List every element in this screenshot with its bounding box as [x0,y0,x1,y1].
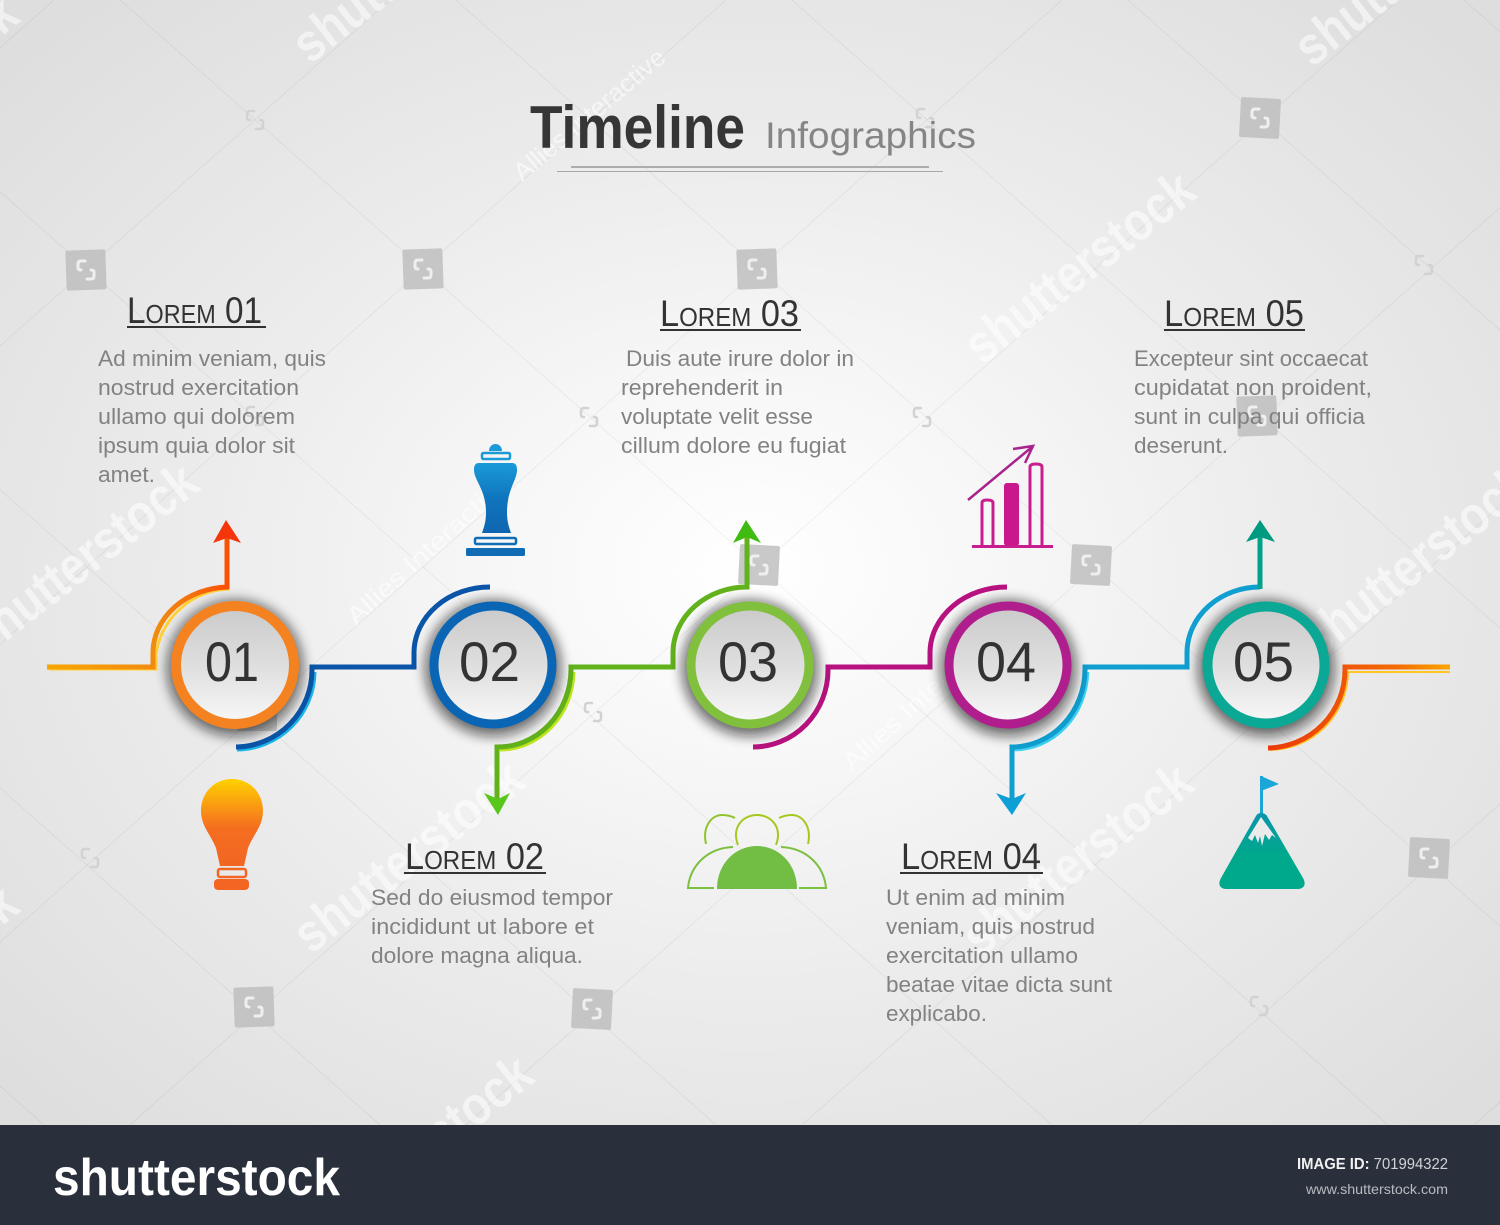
text block: Lorem 01: ipsum quia dolor sit [98,433,296,458]
text block: Lorem 04: exercitation ullamo [886,943,1078,968]
step circle 03: 03 [718,630,778,693]
text block: Lorem 02: incididunt ut labore et [371,914,595,939]
text block: Lorem 02: dolore magna aliqua. [371,943,583,968]
heading: Lorem 04: Lorem 04 [901,836,1041,877]
connector: blue line [236,587,490,750]
footer url: www.shutterstock.com [1305,1181,1448,1197]
watermark overlay: Allies Interactive [508,43,671,187]
step circle 05 [1198,600,1334,736]
connector: cyan line with down arrow [996,520,1275,815]
watermark overlay: shutterstock [281,747,536,964]
text block: Lorem 05: Excepteur sint occaecat [1134,346,1369,371]
text block: Lorem 01: nostrud exercitation [98,375,299,400]
text block: Lorem 01: ullamo qui dolorem [98,404,295,429]
watermark overlay: Allies Interactive [341,469,516,630]
text block: Lorem 04: Ut enim ad minim [886,885,1065,910]
text block: Lorem 01: Ad minim veniam, quis [98,346,326,371]
heading: Lorem 02: Lorem 02 [405,836,544,877]
icon: people group [688,815,826,889]
text block: Lorem 05 [1134,346,1372,458]
title [530,94,976,172]
watermark overlay: shutterstock [950,750,1205,967]
icon: bar chart with arrow [968,446,1053,546]
icon: mountain with flag [1219,776,1305,889]
text block: Lorem 04: explicabo. [886,1001,987,1026]
step circle 01: 01 [205,630,259,693]
text block: Lorem 02 [371,885,614,968]
heading: Lorem 05: Lorem 05 [1164,293,1304,334]
title: Infographics [765,115,976,156]
step circle 04: 04 [976,630,1036,693]
text block: Lorem 02: Sed do eiusmod tempor [371,885,614,910]
footer logo: shutterstock [53,1149,340,1207]
step circle 02: 02 [459,630,520,693]
heading: Lorem 01: Lorem 01 [127,290,262,331]
connector: orange line with up arrow [47,520,241,669]
icon: light bulb [201,779,263,890]
watermark overlay: Allies Interactive [837,615,1012,776]
text block: Lorem 03: cillum dolore eu fugiat [621,433,847,458]
title: Timeline [530,94,745,161]
connector: magenta line [753,587,1007,747]
text block: Lorem 01 [98,346,326,487]
text block: Lorem 05: sunt in culpa qui officia [1134,404,1365,429]
step circle 04 [940,600,1076,736]
footer bar [0,1125,1500,1225]
heading: Lorem 03: Lorem 03 [660,293,799,334]
text block: Lorem 03 [621,346,854,458]
text block: Lorem 04: veniam, quis nostrud [886,914,1095,939]
watermark overlay: shutterstock [952,158,1207,375]
footer image id: IMAGE ID: 701994322 [1297,1156,1448,1173]
text block: Lorem 03: Duis aute irure dolor in [626,346,854,371]
text block: Lorem 05: cupidatat non proident, [1134,375,1372,400]
connector: green line with down arrow [484,520,761,815]
text block: Lorem 03: voluptate velit esse [621,404,813,429]
connector: end orange line [1268,667,1450,750]
text block: Lorem 01: amet. [98,462,155,487]
step circle 05: 05 [1233,630,1294,693]
text block: Lorem 05: deserunt. [1134,433,1228,458]
icon: chess piece [466,444,525,556]
text block: Lorem 04 [886,885,1113,1026]
text block: Lorem 03: reprehenderit in [621,375,783,400]
step circle 03 [682,600,818,736]
step circle 02 [425,600,561,736]
step circle 01 [167,600,303,736]
text block: Lorem 04: beatae vitae dicta sunt [886,972,1113,997]
